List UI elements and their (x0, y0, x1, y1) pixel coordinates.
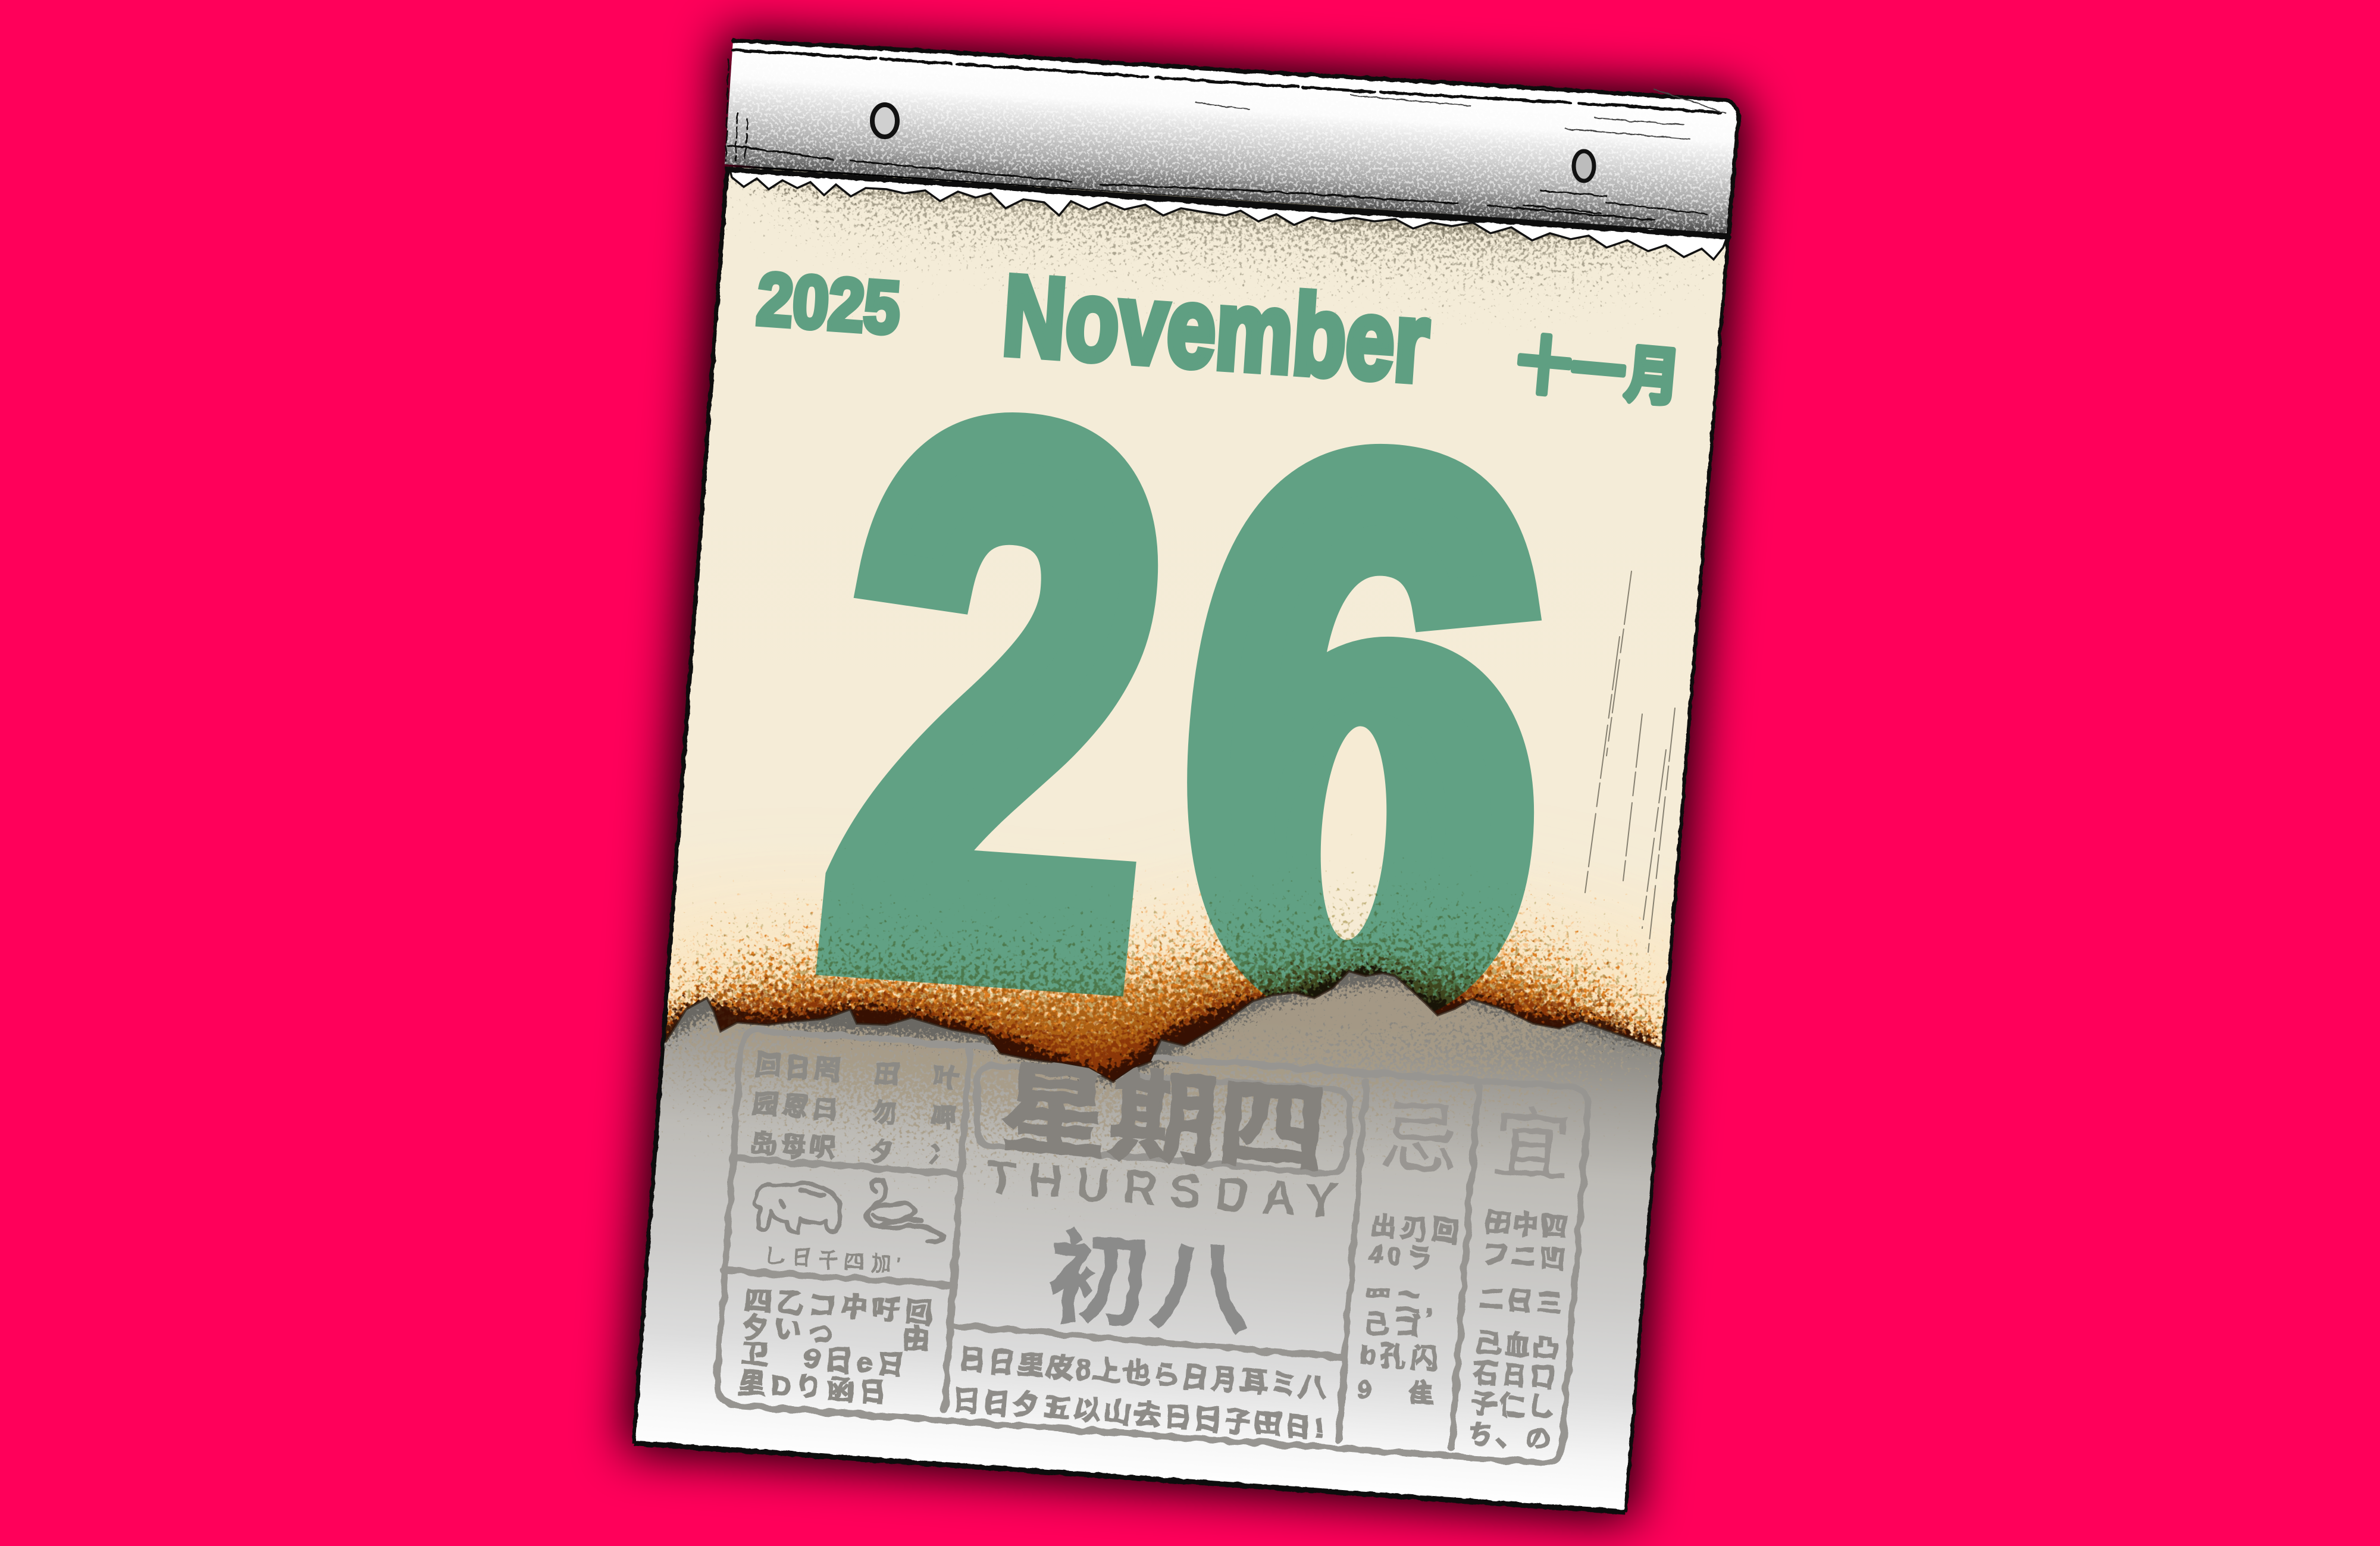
almanac text: suitable column: 二日三 (1477, 1284, 1565, 1319)
icon: elephant (754, 1184, 840, 1233)
burn: dark scorch over the paper and numerals (625, 971, 1696, 1369)
almanac text: bottom centre rows: 日日里皮8上也ら日月耳ミ八 (957, 1344, 1327, 1403)
almanac text: avoid column: 出刃回 (1369, 1212, 1464, 1247)
panel: calendar page (634, 167, 1728, 1512)
almanac text: suitable column (1467, 1207, 1571, 1455)
almanac text: top left cell: 园恩日 勿 呷 (751, 1090, 962, 1133)
almanac text: top left cell: 回日罔 田 叶 (754, 1050, 964, 1094)
almanac text: suitable column: 己血凸 (1474, 1328, 1561, 1363)
digit 6: 6 (1158, 302, 1570, 1164)
panel: grey lower sheet (634, 971, 1661, 1512)
almanac text: bottom left cell: 四乙コ中吁回 (743, 1284, 938, 1329)
month in Chinese: 十一月 (1514, 330, 1683, 414)
icon: snake (868, 1178, 943, 1241)
almanac text: bottom centre rows: 日日夕五以山去日日子田日! (951, 1384, 1324, 1444)
grain: metal speckle (714, 30, 1755, 244)
big date number 26 (802, 272, 1570, 1164)
burnt edge line (662, 971, 1661, 1082)
almanac text: avoid column (1356, 1212, 1464, 1410)
almanac text: suitable column: 田中四 (1483, 1207, 1571, 1243)
almanac text: suitable column: 石日口 (1471, 1358, 1559, 1393)
drop shadow (634, 42, 1739, 1512)
almanac text: bottom left cell: 卫 9日e日 (740, 1338, 910, 1381)
almanac text: avoid column: 9 隹 (1356, 1375, 1439, 1410)
weekday in Chinese: 星期四 (997, 1052, 1330, 1187)
avoid column heading: 忌 (1378, 1093, 1463, 1185)
panel: metal hanging bar (714, 30, 1755, 244)
digit 2: 2 (802, 272, 1195, 1130)
lunar date: 初八 (1042, 1220, 1255, 1348)
almanac text: top left cell: 岛母呎 夕 冫 (749, 1128, 959, 1172)
almanac text: top left cell (749, 1050, 964, 1172)
calendar illustration (585, 0, 1786, 1546)
almanac text: suitable column: フニ凹 (1481, 1240, 1568, 1275)
almanac text: bottom centre rows (951, 1344, 1327, 1444)
icon: left rivet (872, 105, 897, 137)
almanac text: bottom left cell: 夕いっ 由 (741, 1311, 935, 1356)
digit 6 counter (1314, 724, 1393, 942)
suitable column heading: 宜 (1489, 1099, 1574, 1191)
almanac text: avoid column: 罒二, (1363, 1285, 1439, 1319)
almanac text: avoid column: b孔闪 (1358, 1340, 1443, 1375)
burn: outer orange scorch (625, 971, 1696, 1369)
almanac text: avoid column: 己ゴ (1362, 1309, 1426, 1342)
year 2025: 2025 (754, 258, 903, 350)
right side scratches (1585, 571, 1675, 952)
torn paper strip under the bar (729, 168, 1728, 259)
month November: November (999, 252, 1433, 406)
digit 6 inner fill (1286, 744, 1432, 946)
almanac text: suitable column: 子仁し (1469, 1388, 1557, 1423)
paper outline (634, 167, 1728, 1512)
almanac frame and dividers (717, 1031, 1588, 1463)
panel: faded almanac block (717, 1031, 1588, 1463)
bar sketch lines (726, 40, 1739, 237)
panel: cream upper sheet (662, 167, 1728, 1049)
grain: tan speckle on the lower sheet (625, 0, 1696, 1082)
icon: right rivet (1574, 151, 1594, 181)
almanac text: caption under animals: 乚日千四加' (764, 1243, 906, 1277)
almanac text: bottom left cell: 里Dり函日 (737, 1367, 892, 1409)
almanac text: bottom left cell (737, 1284, 938, 1409)
almanac text: avoid column: 40ラ (1367, 1240, 1438, 1273)
almanac text: suitable column: ち、の (1467, 1420, 1554, 1455)
weekday in English: THURSDAY (985, 1150, 1339, 1228)
grain: grey shading below the bar (725, 167, 1724, 344)
